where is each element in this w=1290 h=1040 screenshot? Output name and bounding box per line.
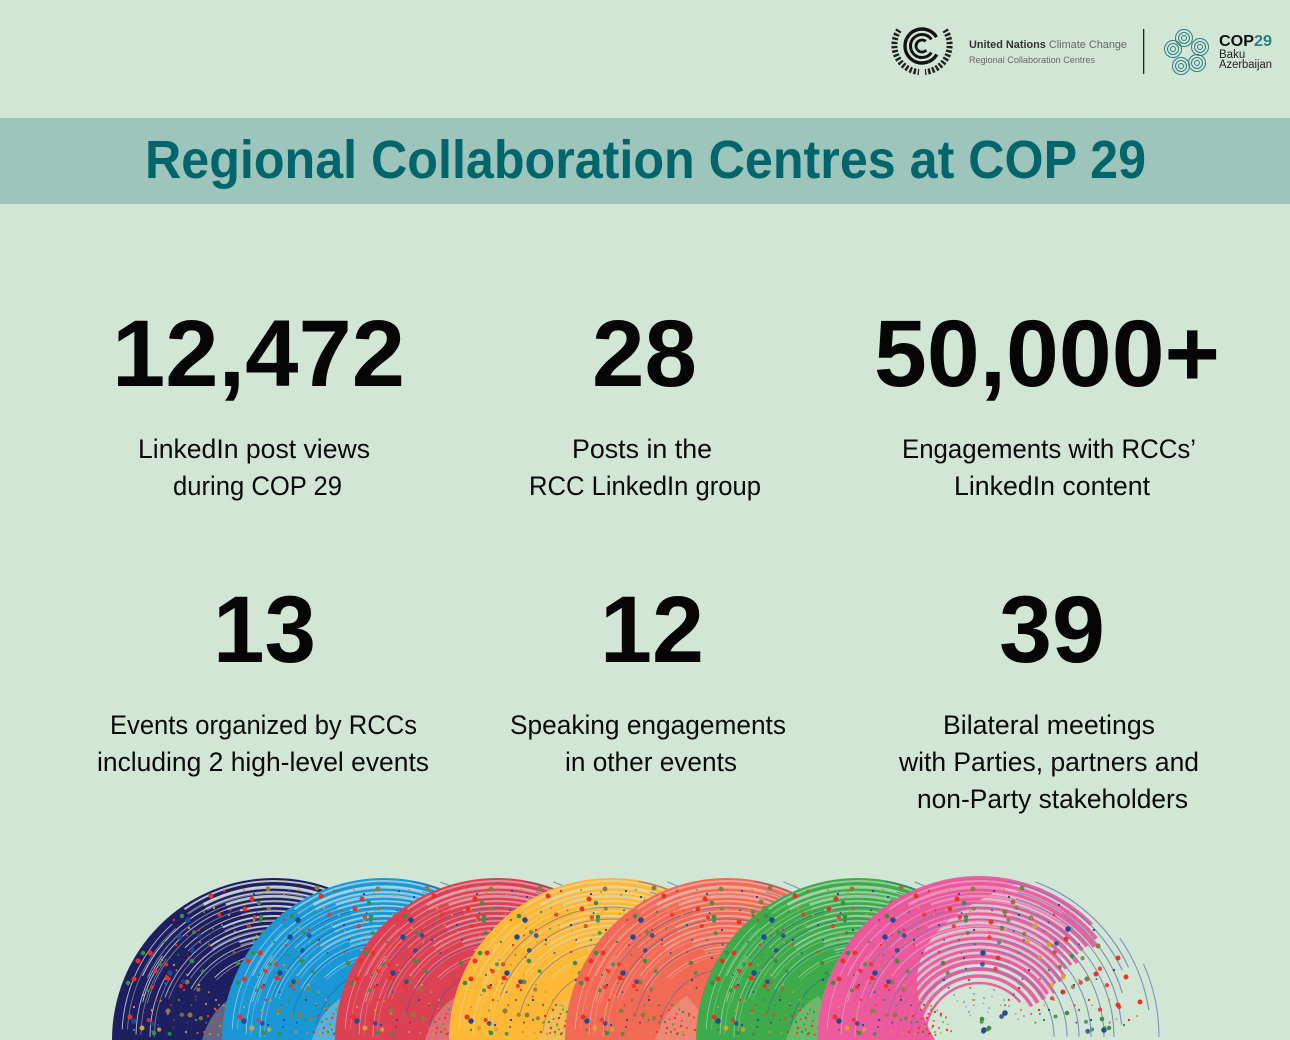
stat: engagements: LinkedIn content [954, 471, 1151, 501]
disc: pink [799, 857, 1159, 1040]
stat: speaking engagements: 12 [600, 577, 704, 683]
text: Regional Collaboration Centres: Regional Collaboration Centres [969, 55, 1095, 65]
stat: LinkedIn post views: during COP 29 [173, 471, 342, 501]
stat: speaking engagements: in other events [565, 747, 737, 777]
stat: speaking engagements: Speaking engagements [510, 710, 786, 740]
disc: blue [204, 857, 564, 1040]
stat: speaking engagements [510, 577, 786, 777]
text: Azerbaijan: Azerbaijan [1219, 59, 1272, 71]
stat: engagements: Engagements with RCCs’ [902, 434, 1196, 464]
stat: engagements: 50,000+ [874, 301, 1220, 407]
stat: posts in group: RCC LinkedIn group [529, 471, 761, 501]
icon: UN climate change emblem [894, 29, 950, 72]
disc: green [678, 857, 1038, 1040]
title: Regional Collaboration Centres at COP 29 [145, 130, 1146, 190]
disc: navy [112, 878, 436, 1040]
stat: LinkedIn post views: LinkedIn post views [138, 434, 370, 464]
stat: LinkedIn post views: 12,472 [112, 301, 405, 407]
stat: events organized: 13 [213, 577, 316, 683]
stat: bilateral meetings: non-Party stakeholders [917, 784, 1188, 814]
text: COP29: COP29 [1219, 33, 1272, 50]
stat: engagements [874, 301, 1220, 501]
title banner [0, 118, 1290, 204]
text: United Nations Climate Change: United Nations Climate Change [969, 39, 1127, 51]
stat: bilateral meetings: Bilateral meetings [943, 710, 1155, 740]
disc: yellow [431, 857, 791, 1040]
stat: events organized: including 2 high-level events [97, 747, 429, 777]
stat: posts in group [529, 301, 761, 501]
text: Baku: Baku [1219, 49, 1245, 61]
stat: LinkedIn post views [112, 301, 405, 501]
stat: bilateral meetings [898, 577, 1199, 814]
disc: red [317, 857, 677, 1040]
decorative arcs illustration [112, 857, 1159, 1040]
stat: events organized [97, 577, 429, 777]
disc: coral [547, 857, 907, 1040]
stat: bilateral meetings: with Parties, partners and [898, 747, 1199, 777]
stat: bilateral meetings: 39 [999, 577, 1105, 683]
icon: COP29 flower emblem [1164, 30, 1208, 74]
stat: events organized: Events organized by RCCs [110, 710, 417, 740]
stat: posts in group: 28 [592, 301, 697, 407]
logo header [894, 29, 1272, 74]
divider line [1143, 29, 1144, 74]
stat: posts in group: Posts in the [572, 434, 712, 464]
